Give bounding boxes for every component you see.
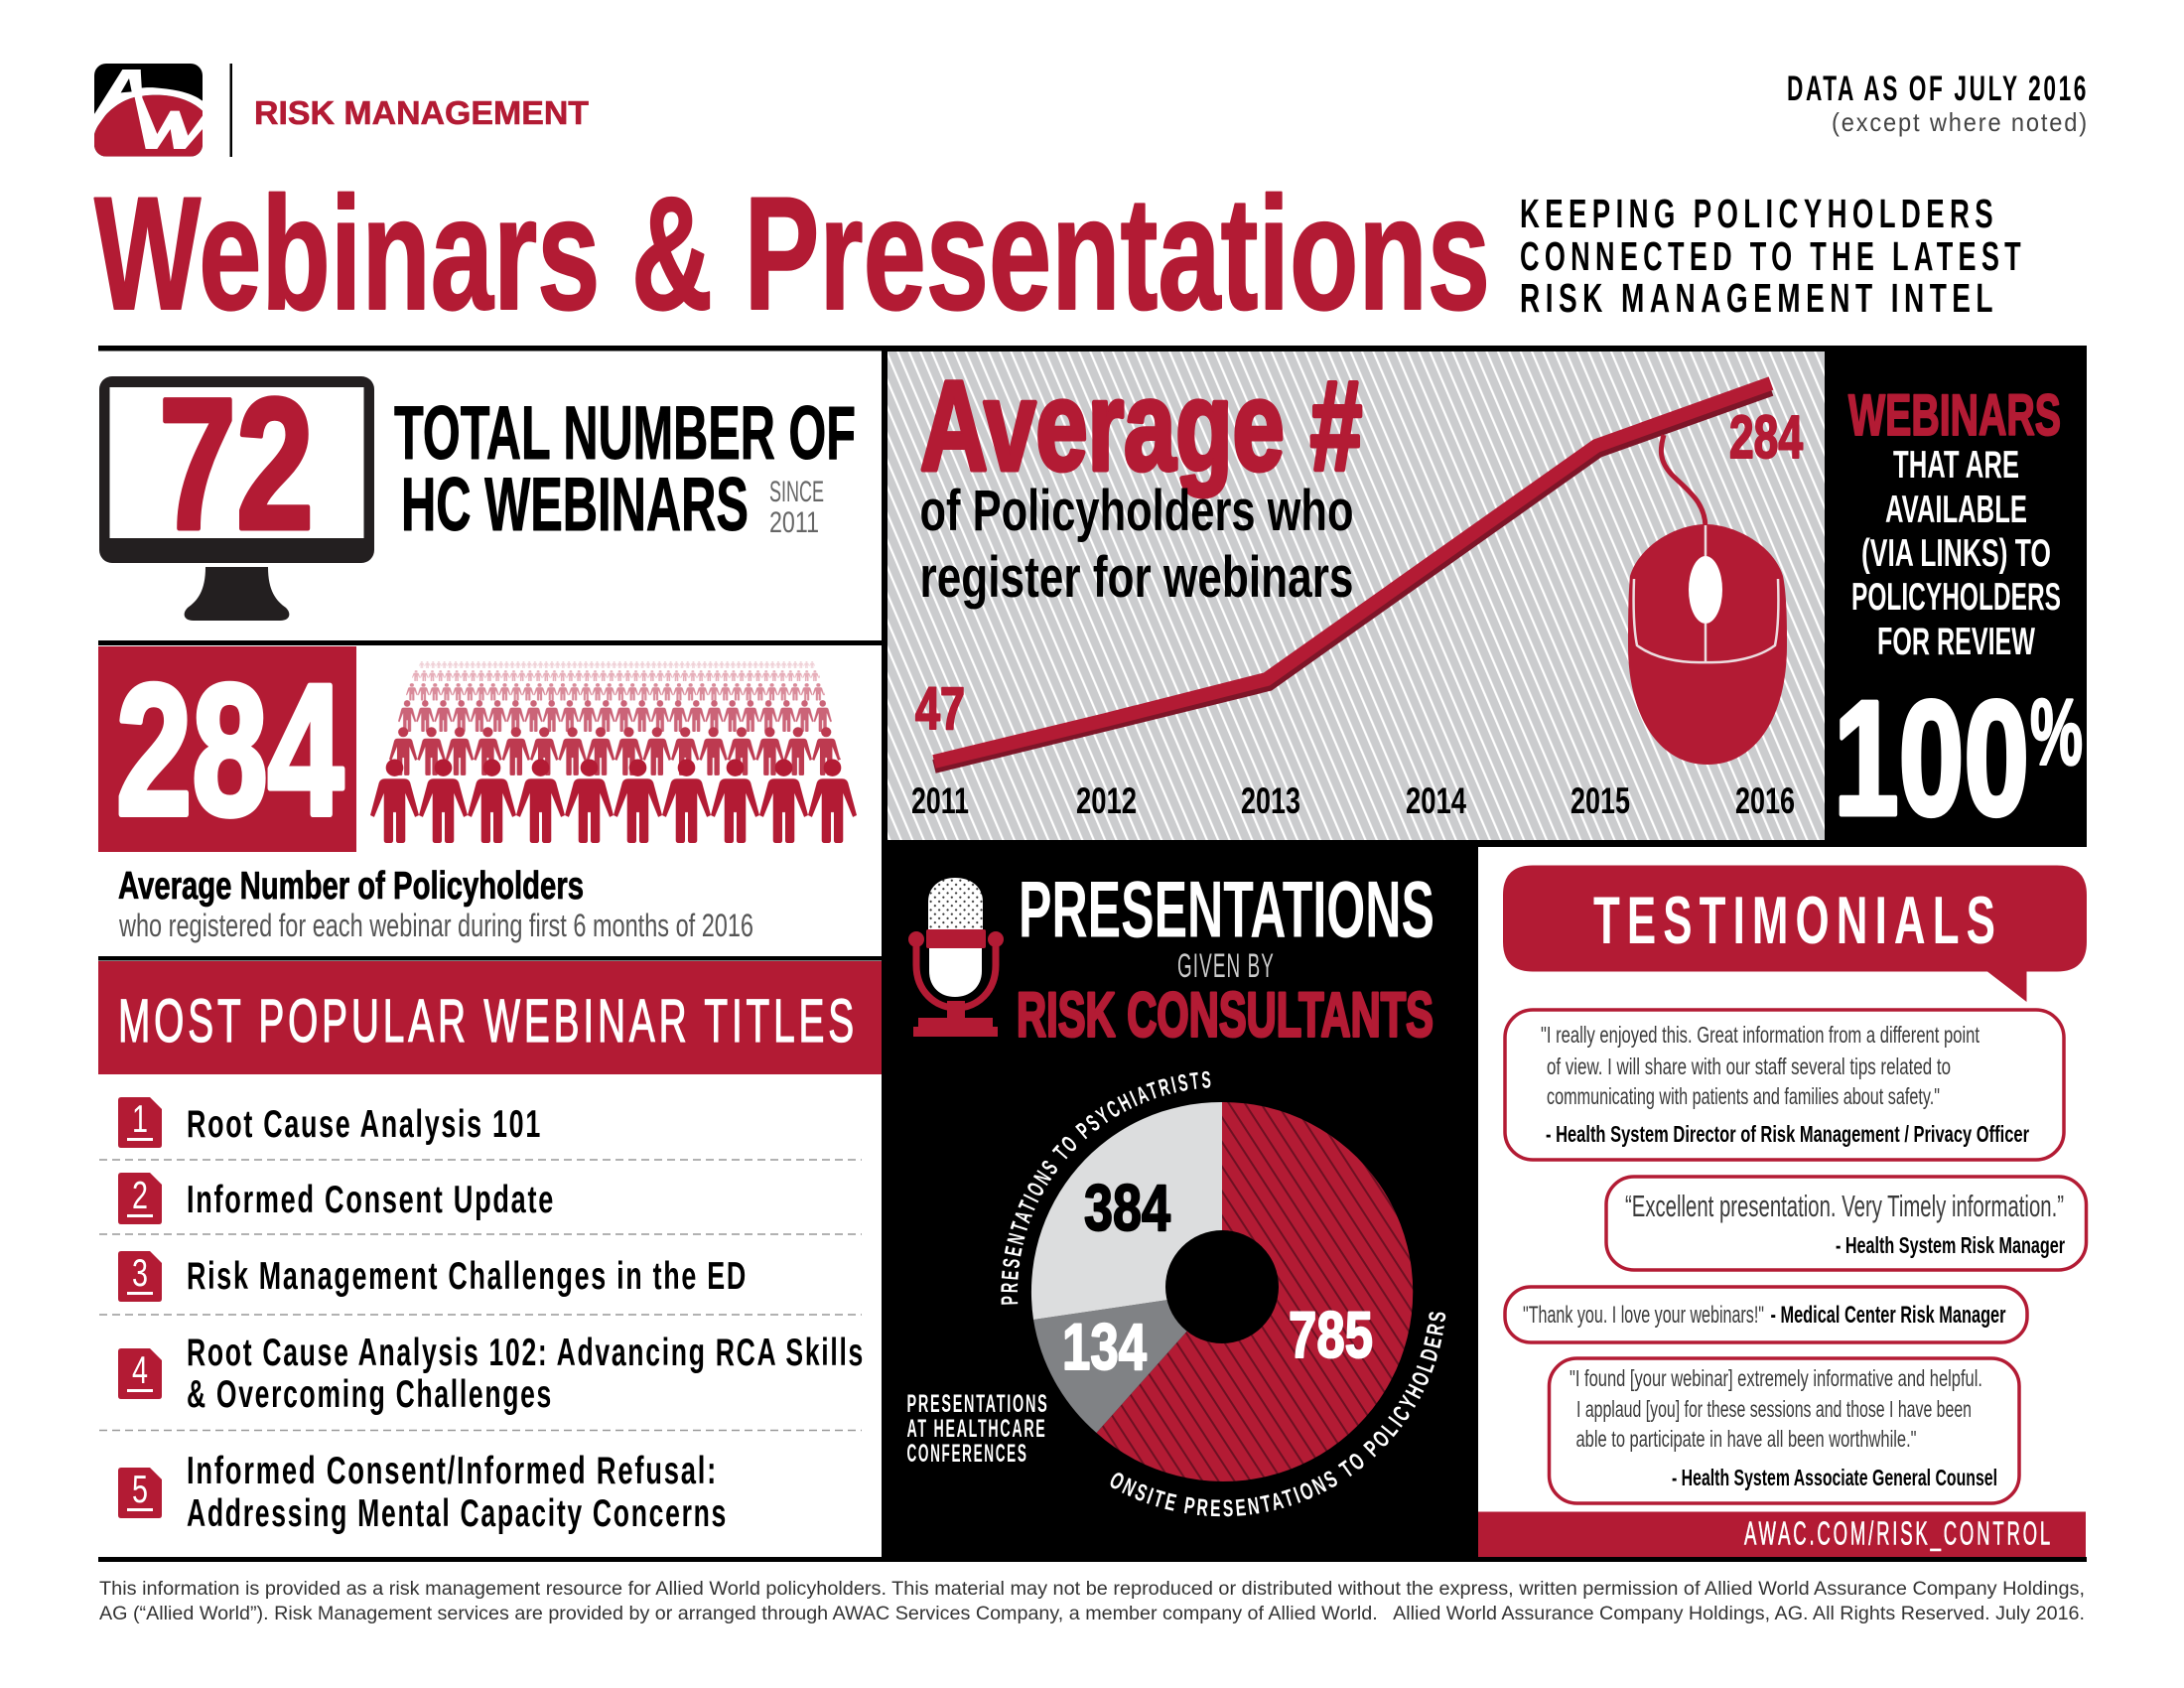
line chart: 2011: [911, 780, 969, 821]
testimonial 2: - Health System Risk Manager: [1836, 1232, 2065, 1258]
line chart: 2012: [1076, 780, 1137, 821]
line chart: 284: [1729, 403, 1803, 471]
item 2: [118, 1173, 555, 1224]
item 5: 5: [132, 1469, 148, 1511]
testimonial 4: - Health System Associate General Counsel: [1672, 1465, 1997, 1490]
item 1: [118, 1097, 542, 1148]
testimonial 3: - Medical Center Risk Manager: [1771, 1302, 2005, 1329]
icon: mouse: [1628, 435, 1787, 765]
label: healthcare conferences: [907, 1390, 1048, 1468]
heading: presentations given by risk consultants: GIVEN BY: [1177, 947, 1275, 985]
heading: presentations given by risk consultants: PRESENTATIONS: [1019, 866, 1434, 955]
side panel: webinars 100%: 100: [1834, 667, 2029, 849]
speech bubble heading: [1503, 866, 2087, 1002]
number: 72: 72: [159, 359, 314, 568]
side panel: webinars 100%: [1834, 383, 2083, 849]
data date note: (except where noted): [1832, 107, 2089, 137]
donut chart: 384: [1084, 1171, 1170, 1244]
item 5: Informed Consent/Informed Refusal:: [187, 1450, 718, 1492]
item 2: Informed Consent Update: [187, 1179, 555, 1221]
side panel: webinars 100%: (VIA LINKS) TO: [1861, 532, 2051, 575]
panel: total webinars: [99, 359, 856, 621]
text: total number of hc webinars: TOTAL NUMBER OF: [394, 391, 856, 476]
side panel: webinars 100%: WEBINARS: [1848, 383, 2061, 448]
testimonial 4: "I found [your webinar] extremely informative and helpful.: [1570, 1365, 1982, 1391]
text: total number of hc webinars: 2011: [769, 506, 819, 539]
data date note: [1787, 70, 2089, 137]
footer disclaimer: This information is provided as a risk management resource for Allied World policyholders. This material may not be reproduced or distributed without the express, written permission of Allied World Assurance Company Holdings,: [99, 1579, 2085, 1600]
testimonial 1: [1505, 1010, 2064, 1160]
panel: most popular webinar titles: [98, 961, 882, 1535]
side panel: webinars 100%: AVAILABLE: [1885, 489, 2027, 531]
label: onsite presentations to policyholders: ONSITE PRESENTATIONS TO POLICYHOLDERS: [1110, 1312, 1445, 1517]
side panel: webinars 100%: FOR REVIEW: [1877, 621, 2035, 663]
testimonial 1: communicating with patients and families about safety.": [1547, 1083, 1940, 1109]
line chart: 47: [915, 675, 965, 742]
item 4: 4: [132, 1349, 148, 1392]
text: total number of hc webinars: [394, 391, 856, 547]
line chart: [911, 383, 1803, 821]
side panel: webinars 100%: %: [2030, 680, 2083, 785]
footer disclaimer: AG (“Allied World”). Risk Management services are provided by or arranged through AWAC Services Company, a member company of Allied World. Allied World Assurance Company Holdings, AG. All Rights Reserved. July 2016.: [99, 1604, 2085, 1624]
label: healthcare conferences: CONFERENCES: [907, 1440, 1028, 1468]
panel: presentations: [887, 847, 1478, 1557]
heading: presentations given by risk consultants: RISK CONSULTANTS: [1017, 981, 1433, 1051]
label: presentations to psychiatrists: PRESENTATIONS TO PSYCHIATRISTS: [1001, 1070, 1211, 1305]
item 5: Addressing Mental Capacity Concerns: [187, 1492, 728, 1535]
icon: microphone: [908, 878, 1004, 1037]
heading: presentations given by risk consultants: [1017, 866, 1434, 1051]
donut chart: 785: [1289, 1298, 1373, 1371]
line chart: 2013: [1241, 780, 1300, 821]
website bar: [1478, 1511, 2086, 1557]
donut chart: 134: [1062, 1310, 1147, 1383]
item 3: 3: [132, 1252, 148, 1295]
item 4: Root Cause Analysis 102: Advancing RCA Skills: [187, 1332, 865, 1374]
item 3: [118, 1251, 748, 1302]
item 4: [118, 1332, 865, 1416]
testimonial 3: "Thank you. I love your webinars!": [1523, 1302, 1764, 1329]
donut chart: [1031, 1102, 1413, 1481]
text: total number of hc webinars: SINCE: [769, 476, 824, 508]
caption: [118, 865, 753, 943]
side panel: webinars 100%: POLICYHOLDERS: [1851, 576, 2061, 619]
header logo: [94, 64, 232, 157]
heading: risk management: RISK MANAGEMENT: [254, 94, 589, 131]
testimonial 4: [1549, 1358, 2019, 1503]
title: Webinars & Presentations: [94, 164, 1490, 344]
item 2: 2: [132, 1175, 148, 1217]
testimonial 4: able to participate in have all been worthwhile.": [1576, 1426, 1916, 1452]
heading: average #: of Policyholders who: [919, 479, 1354, 543]
icon: crowd of people: [370, 661, 857, 843]
line chart: 2015: [1570, 780, 1630, 821]
testimonial 3: [1505, 1287, 2027, 1342]
text: total number of hc webinars: HC WEBINARS: [401, 463, 749, 547]
line chart: 2016: [1735, 780, 1795, 821]
banner heading: MOST POPULAR WEBINAR TITLES: [118, 987, 858, 1055]
label: healthcare conferences: AT HEALTHCARE: [907, 1415, 1046, 1443]
heading: average #: [919, 355, 1362, 610]
panel: average 284: [98, 645, 857, 943]
caption: Average Number of Policyholders: [118, 865, 584, 908]
item 1: 1: [132, 1098, 148, 1141]
item 4: & Overcoming Challenges: [187, 1373, 553, 1416]
line chart: 2014: [1406, 780, 1466, 821]
subtitle: [1520, 191, 2026, 321]
panel: testimonials: [1478, 866, 2087, 1557]
banner heading: [98, 961, 882, 1074]
heading: average #: Average #: [920, 355, 1362, 497]
caption: who registered for each webinar during first 6 months of 2016: [118, 908, 753, 943]
testimonial 1: of view. I will share with our staff several tips related to: [1547, 1054, 1951, 1079]
label: healthcare conferences: PRESENTATIONS: [907, 1390, 1048, 1418]
item 3: Risk Management Challenges in the ED: [187, 1255, 748, 1298]
footer disclaimer: [99, 1579, 2085, 1624]
stat box: 284: 284: [116, 645, 343, 854]
heading: average #: register for webinars: [919, 545, 1354, 610]
testimonial 4: I applaud [you] for these sessions and those I have been: [1576, 1396, 1972, 1422]
item 5: [118, 1450, 728, 1535]
side panel: webinars 100%: THAT ARE: [1893, 444, 2019, 487]
testimonial 1: "I really enjoyed this. Great information from a different point: [1541, 1022, 1979, 1048]
panel: average registrations line chart: [884, 346, 2087, 849]
testimonial 2: [1606, 1177, 2087, 1270]
icon: monitor: [99, 376, 374, 621]
item 1: Root Cause Analysis 101: [187, 1103, 542, 1146]
